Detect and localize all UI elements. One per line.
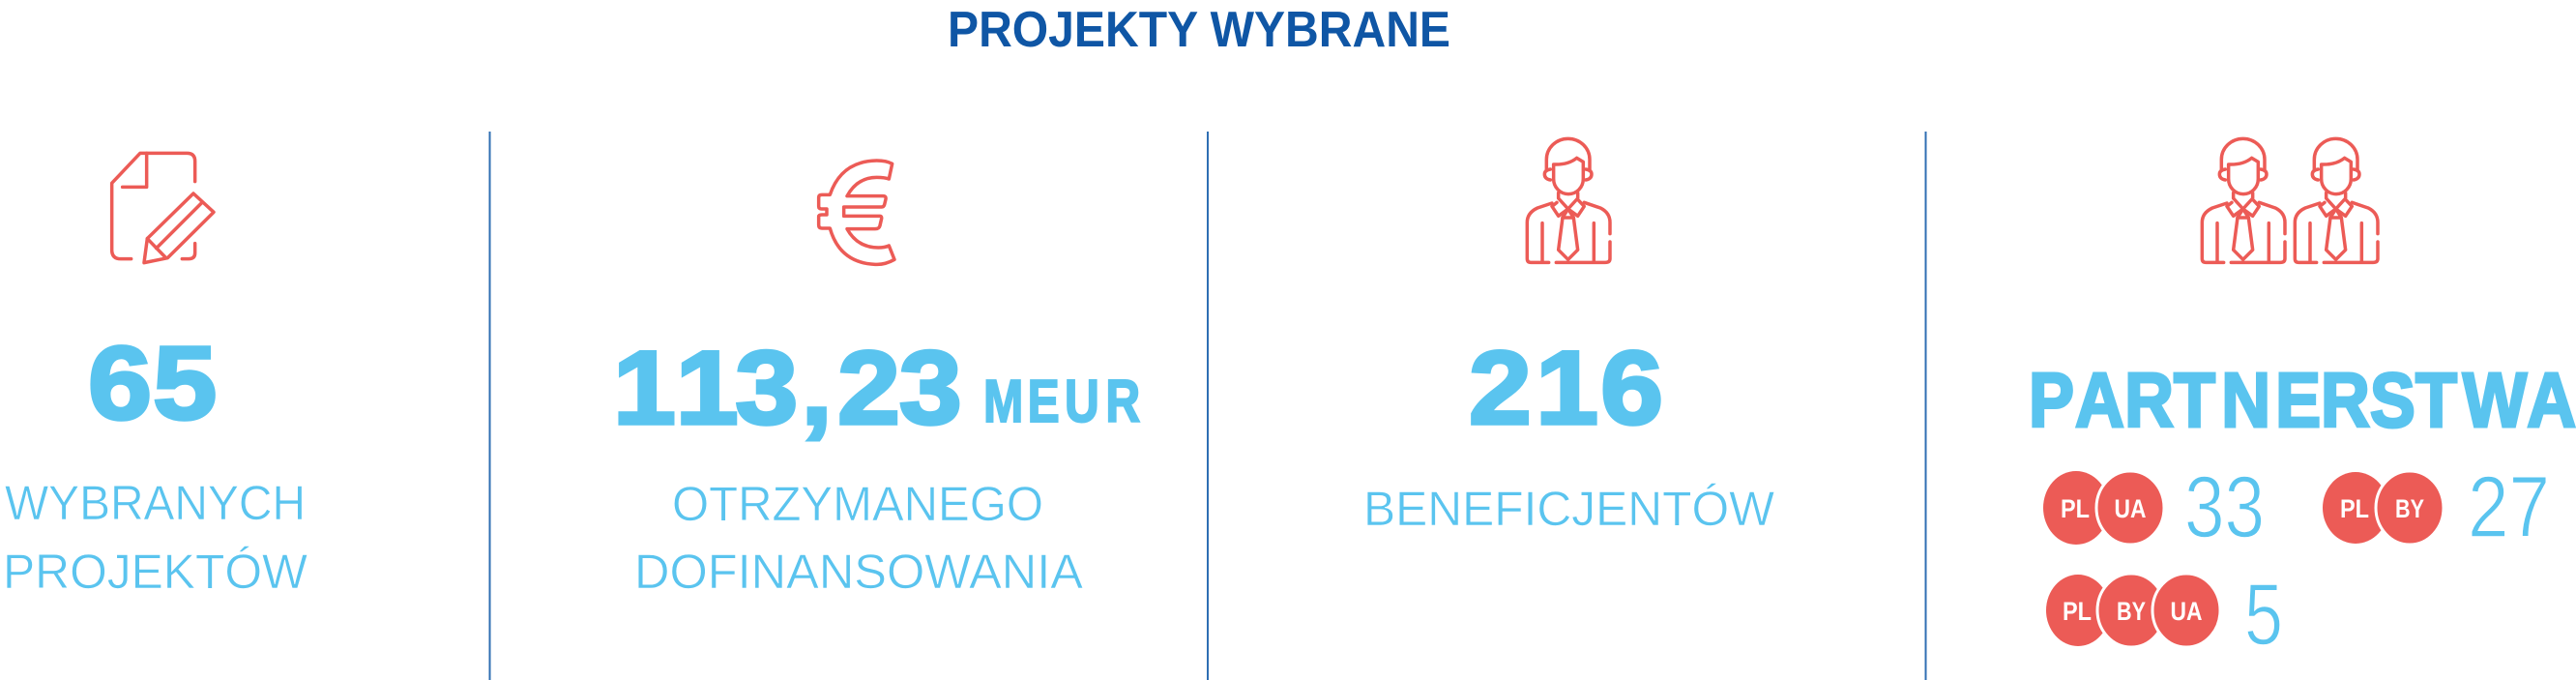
number: 65: 65: [88, 325, 217, 442]
value: 33: 33: [2184, 459, 2265, 556]
heading: partnerstwa: PARTNERSTWA: [2029, 357, 2576, 443]
label: otrzymanego dofinansowania: DOFINANSOWANIA: [634, 545, 1084, 599]
badges: PL BY UA: UA: [2170, 597, 2203, 626]
number: 113,23: 113,23: [613, 329, 962, 446]
badges: PL UA: PL: [2061, 494, 2090, 523]
number: 216: 216: [1469, 329, 1663, 446]
panel: beneficiaries: [1363, 138, 1775, 536]
panel: partnerships: [2029, 138, 2576, 664]
badges: PL BY UA: PL: [2063, 597, 2092, 626]
label: otrzymanego dofinansowania: [634, 477, 1084, 599]
title: PROJEKTY WYBRANE: [948, 2, 1450, 58]
icon: two persons: [2202, 138, 2378, 262]
label: wybranych projektow: PROJEKTÓW: [3, 545, 308, 599]
icon: person: [1527, 138, 1610, 262]
badges: PL BY UA: [2046, 574, 2220, 647]
badges: PL BY UA: BY: [2117, 597, 2146, 626]
label: beneficjentow: BENEFICJENTÓW: [1363, 482, 1775, 536]
unit: MEUR: MEUR: [983, 368, 1140, 434]
label: wybranych projektow: WYBRANYCH: [5, 476, 306, 530]
panel: selected projects: [3, 153, 308, 599]
icon: document with pencil: [112, 153, 214, 263]
icon: euro sign: [819, 161, 894, 264]
badges: PL BY: [2323, 471, 2444, 545]
value: 5: 5: [2244, 567, 2283, 664]
badges: PL BY: BY: [2395, 494, 2424, 523]
label: wybranych projektow: [3, 476, 308, 599]
panel: funding: [613, 161, 1140, 599]
badges: PL BY: PL: [2340, 494, 2369, 523]
label: otrzymanego dofinansowania: OTRZYMANEGO: [672, 477, 1043, 531]
value: 27: 27: [2468, 459, 2550, 556]
badges: PL UA: [2043, 471, 2164, 545]
badges: PL UA: UA: [2114, 494, 2147, 523]
